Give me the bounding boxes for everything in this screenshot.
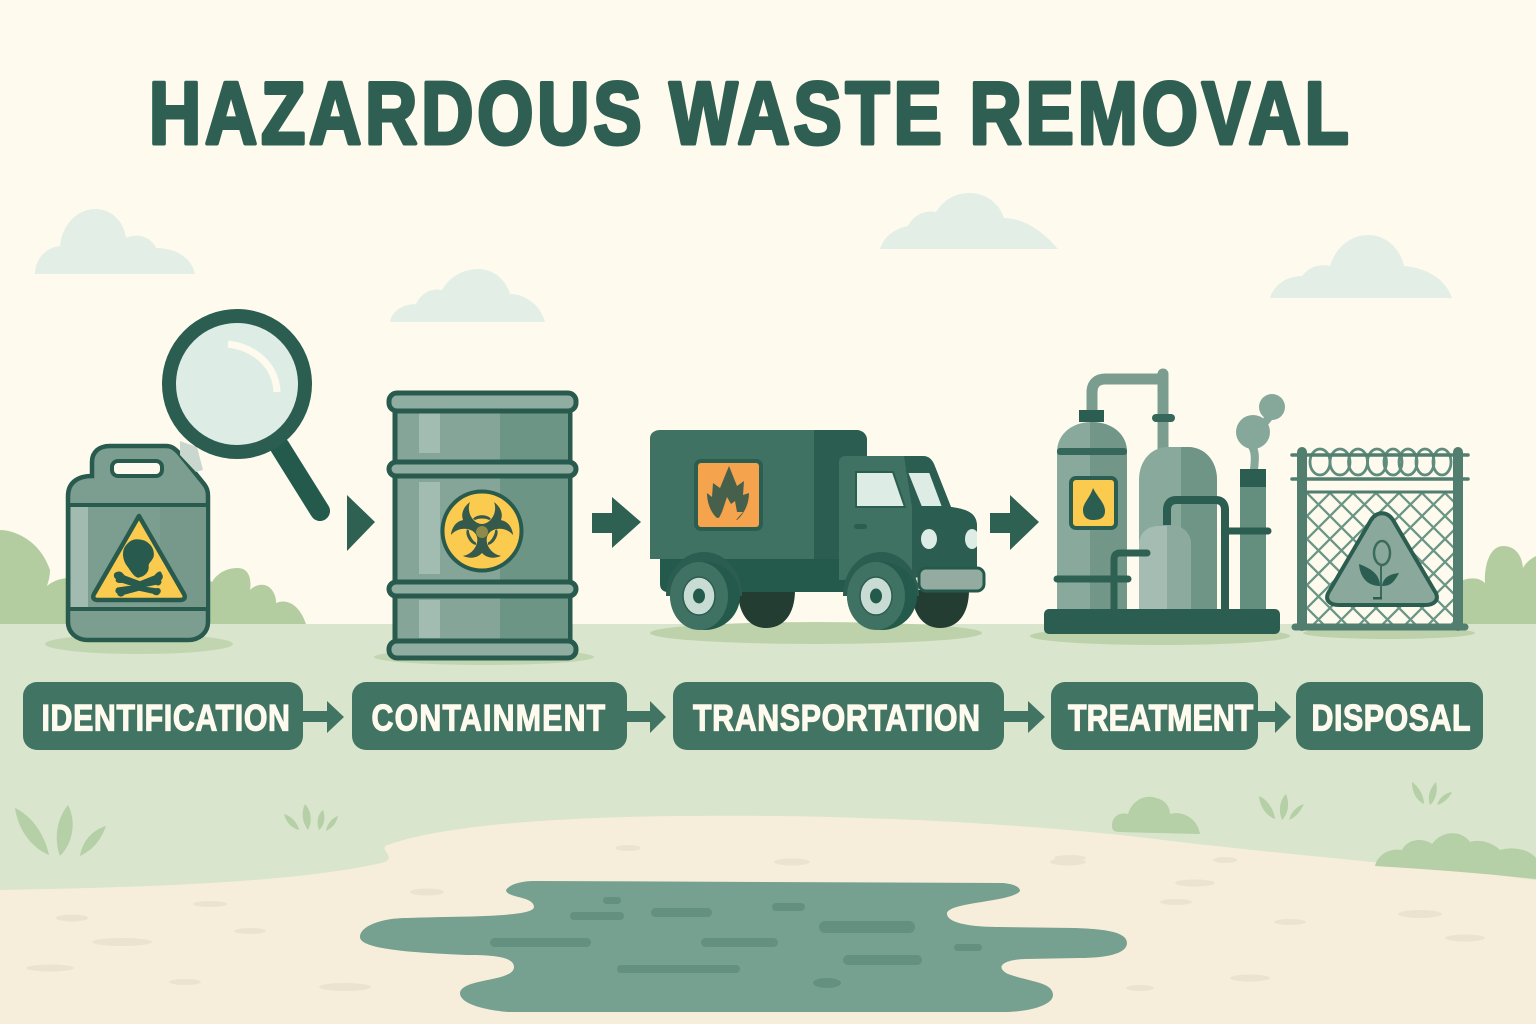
pipe overhead [1092, 379, 1165, 412]
step label: transportation [673, 682, 1045, 750]
chimney [1240, 469, 1266, 609]
icon: jerrycan with poison sign [45, 446, 233, 654]
tuft centre [284, 804, 338, 831]
icon: treatment plant [1030, 374, 1290, 645]
bumper [919, 568, 984, 591]
tank sign [1071, 478, 1116, 528]
warning triangle [93, 516, 185, 600]
truck shadow [650, 622, 982, 644]
jerrycan right shade [160, 507, 206, 607]
chain mesh [1307, 493, 1453, 624]
jerrycan body [68, 446, 208, 640]
window front [907, 472, 943, 507]
sand path [0, 816, 1536, 1024]
puddle [360, 881, 1127, 1012]
fence frame [1292, 452, 1468, 627]
icon: drop [1083, 488, 1105, 520]
sand pebbles [26, 845, 1485, 991]
razor wire [1310, 449, 1451, 475]
arrow 1 [347, 495, 375, 551]
lens glint smudge [180, 441, 203, 472]
cab [839, 456, 977, 580]
cloud 1 [35, 209, 195, 274]
tank middle [1139, 447, 1217, 609]
jerrycan shadow [45, 634, 233, 654]
drum right shade [500, 407, 568, 643]
plant base [1044, 609, 1280, 634]
bush right [1463, 546, 1536, 624]
drum body [395, 405, 570, 645]
step label: disposal: DISPOSAL [1312, 698, 1471, 739]
tank small [1139, 526, 1191, 609]
handle hole [112, 461, 162, 476]
ground [0, 624, 1536, 1024]
door handle [854, 524, 867, 529]
icon: drum with biohazard sign [374, 393, 594, 665]
handle [280, 447, 320, 511]
tank band [1057, 448, 1127, 455]
icon: magnifying glass [169, 316, 320, 511]
lens highlight [228, 344, 277, 392]
bush lower right [1375, 833, 1536, 879]
cloud 3 [880, 193, 1058, 249]
plant shadow [1030, 627, 1290, 645]
smoke [1236, 394, 1285, 470]
low pipes [1057, 553, 1147, 609]
cargo box [650, 430, 867, 559]
lens [169, 316, 305, 452]
front wheel [843, 552, 919, 630]
headlights [921, 529, 979, 549]
fence shadow [1303, 627, 1475, 639]
step label: disposal [1296, 682, 1483, 750]
window side [856, 472, 905, 507]
arrow 2 [592, 497, 641, 548]
bush middle [205, 568, 306, 624]
flammable sign [696, 461, 761, 529]
tank cap [1079, 410, 1104, 422]
step label: treatment [1051, 682, 1291, 750]
bush left [0, 530, 70, 624]
step label: identification [23, 682, 344, 750]
icon: truck [650, 430, 984, 644]
cloud 4 [1270, 235, 1452, 298]
chassis [660, 555, 900, 592]
dark pipes [1167, 500, 1225, 609]
drum rims [389, 393, 576, 658]
step label: transportation: TRANSPORTATION [693, 698, 980, 739]
skull and crossbones [115, 540, 162, 596]
cab front shade [904, 456, 977, 578]
title: HAZARDOUS WASTE REMOVAL [149, 65, 1349, 163]
plant warning sign [1327, 513, 1437, 605]
step label: identification: IDENTIFICATION [42, 698, 290, 739]
drum highlights [419, 412, 440, 638]
step label: containment [352, 682, 666, 750]
arrow 3 [990, 495, 1039, 550]
tank left [1057, 422, 1127, 609]
bush on grass [1112, 797, 1200, 834]
pipe clamp [1152, 414, 1175, 422]
step label: treatment: TREATMENT [1068, 698, 1254, 739]
tuft far right [1412, 782, 1452, 805]
step label: containment: CONTAINMENT [372, 698, 605, 739]
jerrycan highlight [71, 507, 88, 607]
box shade [814, 430, 867, 559]
biohazard sign [442, 492, 522, 570]
drum shadow [374, 649, 594, 665]
rear wheel [666, 552, 742, 630]
cloud 2 [390, 269, 545, 322]
tuft left [15, 805, 106, 856]
icon: fence with plant sign [1292, 449, 1475, 639]
rear dark wheels [738, 590, 795, 628]
puddle ripples [490, 897, 982, 988]
tuft right [1259, 794, 1304, 820]
